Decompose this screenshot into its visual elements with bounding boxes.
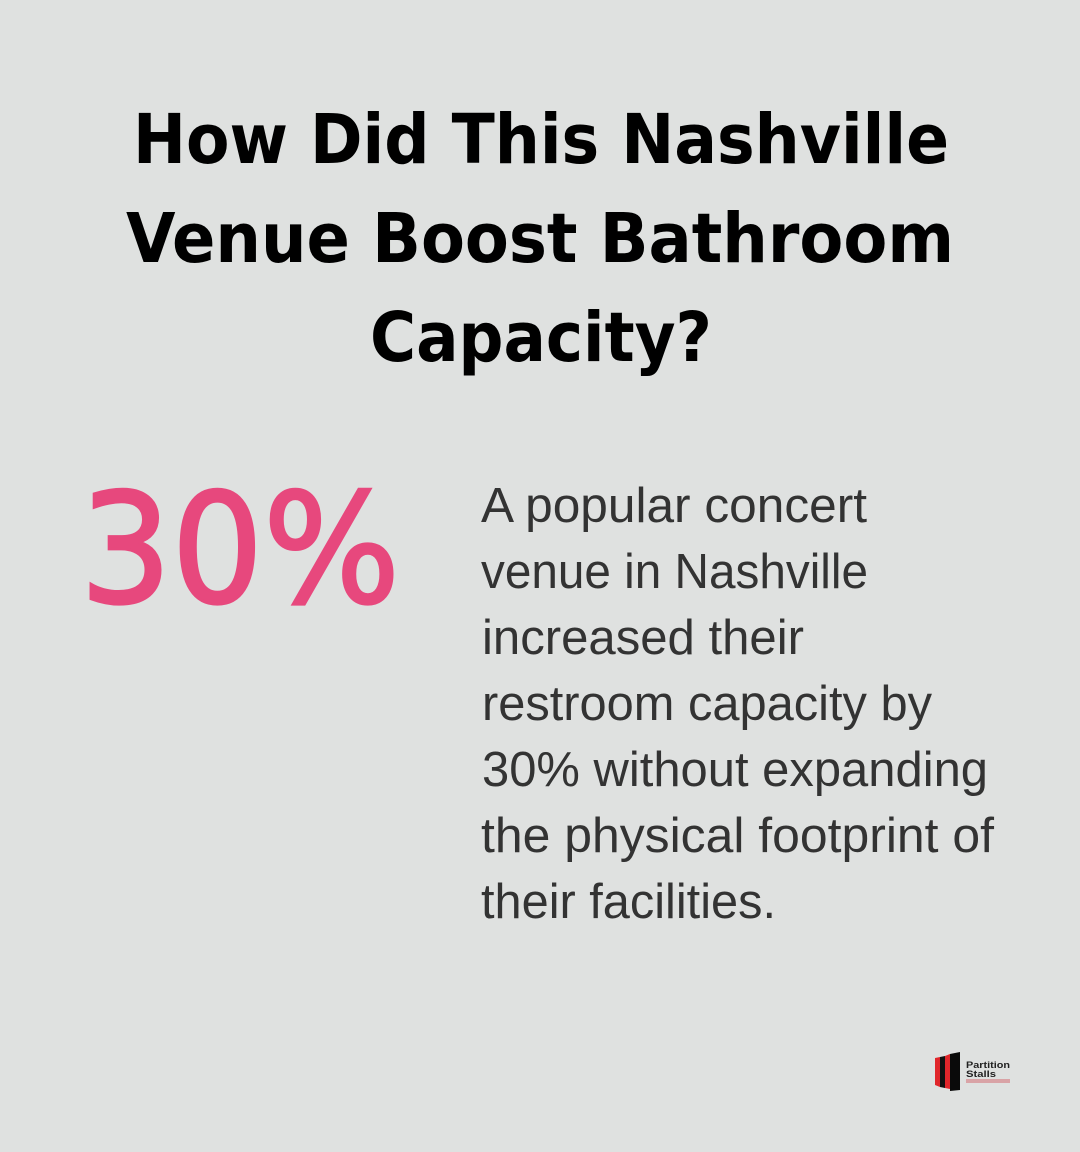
description text: their facilities.	[481, 875, 776, 929]
logo wordmark: Stalls	[966, 1069, 996, 1080]
logo: Partition Stalls	[935, 1052, 1010, 1091]
description text	[481, 479, 994, 929]
title: Venue Boost Bathroom	[126, 199, 954, 279]
title: How Did This Nashville	[133, 100, 949, 180]
description text: venue in Nashville	[481, 545, 868, 599]
title: Capacity?	[370, 298, 712, 378]
description text: restroom capacity by	[482, 677, 932, 731]
description text: increased their	[482, 611, 804, 665]
logo wordmark	[966, 1060, 1010, 1083]
description text: the physical footprint of	[481, 809, 994, 863]
icon: partition panels	[935, 1052, 960, 1091]
title	[126, 100, 954, 378]
big statistic: 30%: 30%	[80, 461, 400, 638]
description text: A popular concert	[481, 479, 867, 533]
logo wordmark: Partition	[966, 1060, 1010, 1071]
description text: 30% without expanding	[482, 743, 988, 797]
